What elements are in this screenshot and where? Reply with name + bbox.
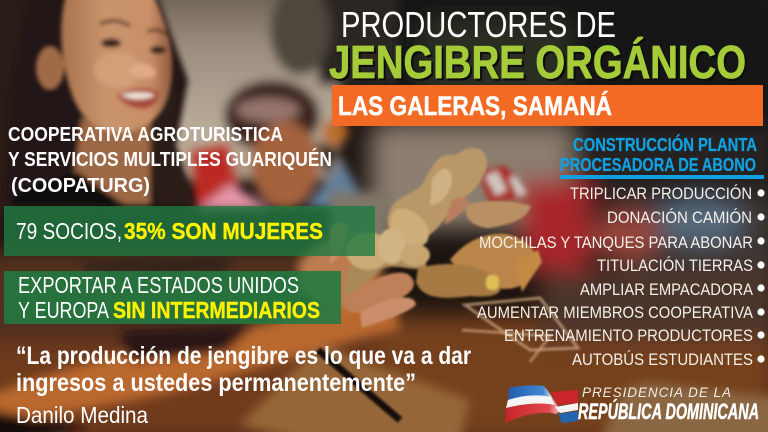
heading: fertilizer plant: [560, 134, 764, 179]
logo: presidencia: [505, 385, 759, 424]
panel: members: 35% SON MUJERES: [124, 218, 323, 244]
location banner: LAS GALERAS, SAMANÁ: [338, 90, 612, 121]
list: planned actions: DONACIÓN CAMIÓN: [607, 208, 752, 227]
location banner: [332, 85, 763, 126]
cooperative name: COOPERATIVA AGROTURISTICA: [8, 124, 283, 146]
panel: export: [4, 271, 341, 324]
quote: [16, 342, 471, 428]
baskets and dark strap: [465, 298, 578, 350]
icon: dominican flag: [505, 385, 578, 423]
quote: ingresos a ustedes permanentemente”: [16, 369, 416, 397]
striped shirt: [478, 165, 530, 205]
first woman hair and neck: [5, 0, 195, 205]
wall: [150, 0, 340, 180]
cooperative name: [8, 124, 332, 197]
quote attribution: Danilo Medina: [16, 402, 148, 428]
logo: presidencia: PRESIDENCIA DE LA: [582, 385, 731, 400]
second woman: [224, 80, 320, 152]
panel: members: [4, 206, 375, 256]
cooperative name: Y SERVICIOS MULTIPLES GUARIQUÉN: [8, 148, 332, 171]
panel: export: EXPORTAR A ESTADOS UNIDOS: [18, 272, 299, 298]
list: planned actions: [477, 184, 765, 369]
hands: [343, 273, 414, 312]
arms and lower body: [0, 280, 400, 425]
panel: title: [329, 4, 748, 90]
panel: members: 79 SOCIOS,: [16, 218, 122, 244]
panel: export: SIN INTERMEDIARIOS: [113, 297, 320, 323]
heading: productores de: PRODUCTORES DE: [341, 4, 616, 45]
first woman face: [61, 0, 172, 133]
ginger roots: [345, 243, 426, 296]
quote: “La producción de jengibre es lo que va a dar: [16, 342, 471, 370]
panel: export: Y EUROPA: [18, 297, 110, 323]
cooperative name: (COOPATURG): [11, 175, 150, 197]
